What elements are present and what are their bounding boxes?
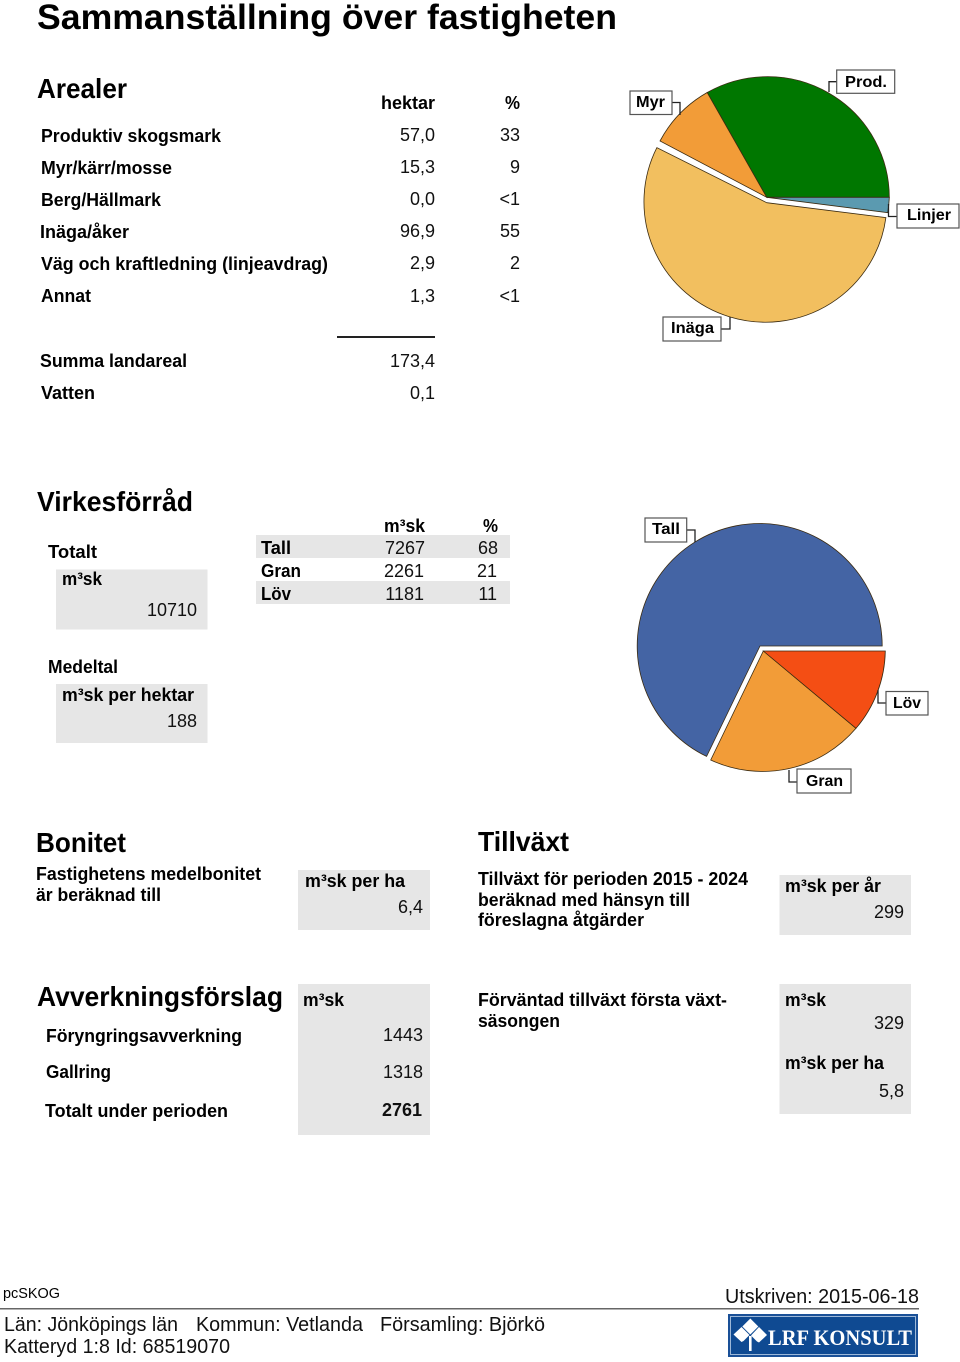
- property location: [4, 1314, 545, 1336]
- value box: totalt: m³sk: [62, 569, 103, 589]
- software name: pcSKOG: [3, 1285, 60, 1302]
- row: vatten: Vatten: [41, 383, 95, 403]
- label: Löv: [878, 690, 928, 715]
- text: förväntad tillväxt: [478, 990, 727, 1031]
- label: Tall: Tall: [652, 521, 680, 538]
- footer rule: [0, 1308, 919, 1310]
- value box: förväntad tillväxt: [780, 984, 911, 1114]
- species table: %: [483, 516, 498, 536]
- row: annat: 1,3: [410, 286, 435, 306]
- row: berg: <1: [499, 189, 520, 209]
- text: bonitet description: [36, 864, 261, 905]
- species table: Gran: [261, 561, 301, 581]
- label: Myr: [630, 91, 680, 115]
- label: Inäga: [663, 317, 730, 341]
- row: vatten: [41, 383, 435, 403]
- row: gallring: Gallring: [46, 1062, 111, 1082]
- value box: tillväxt per år: 299: [874, 902, 904, 922]
- panel: arealer table: [37, 73, 520, 403]
- row: inäga: [40, 221, 520, 242]
- row: myr: 9: [510, 157, 520, 177]
- species table: 68: [478, 538, 498, 558]
- row: myr: 15,3: [400, 157, 435, 177]
- row: produktiv skogsmark: [41, 125, 520, 146]
- text: förväntad tillväxt: säsongen: [478, 1011, 560, 1031]
- label: Löv: Löv: [893, 695, 921, 712]
- wedge: Prod.: [707, 77, 889, 197]
- value box: förväntad tillväxt: m³sk per ha: [785, 1053, 885, 1073]
- value box: medeltal: m³sk per hektar: [62, 685, 194, 705]
- heading: arealer: Arealer: [37, 73, 127, 104]
- value box: tillväxt per år: m³sk per år: [785, 876, 881, 896]
- panel: virkesförråd: [37, 486, 510, 743]
- row: inäga: 96,9: [400, 221, 435, 241]
- row: annat: [41, 286, 520, 306]
- row: myr: Myr/kärr/mosse: [41, 158, 172, 178]
- label: Gran: [789, 769, 851, 793]
- value box: tillväxt per år: [780, 875, 911, 935]
- footer: [0, 1285, 919, 1358]
- species table: [256, 516, 510, 604]
- row: berg: 0,0: [410, 189, 435, 209]
- row: summa landareal: [40, 351, 435, 371]
- species table: 7267: [385, 538, 425, 558]
- wedge: Löv: [763, 651, 885, 728]
- row: totalt under perioden: 2761: [382, 1100, 422, 1120]
- text: förväntad tillväxt: Förväntad tillväxt första växt-: [478, 990, 727, 1010]
- column headers: hektar: [381, 93, 435, 113]
- row: inäga: Inäga/åker: [40, 222, 129, 242]
- text: bonitet description: är beräknad till: [36, 885, 161, 905]
- label: Prod.: Prod.: [845, 74, 887, 91]
- row: gallring: [46, 1062, 423, 1082]
- wedge: Gran: [711, 651, 856, 771]
- row: väg och kraftledning: [41, 253, 520, 274]
- species table: 1181: [385, 584, 424, 604]
- species table: 21: [477, 561, 497, 581]
- text: tillväxt description: beräknad med hänsyn till: [478, 890, 690, 910]
- label: Linjer: [888, 204, 959, 228]
- value box background: [298, 984, 430, 1135]
- print date: Utskriven: 2015-06-18: [725, 1286, 919, 1308]
- row: totalt under perioden: Totalt under perioden: [45, 1101, 228, 1121]
- species table: 2261: [384, 561, 424, 581]
- panel: tillväxt: [478, 826, 911, 935]
- heading: virkesförråd: Virkesförråd: [37, 486, 193, 517]
- label: Myr: Myr: [636, 94, 665, 111]
- value box: förväntad tillväxt: 5,8: [879, 1081, 904, 1101]
- species table: m³sk: [384, 516, 426, 536]
- column unit: m³sk: [303, 990, 345, 1010]
- row: annat: Annat: [41, 286, 91, 306]
- row: berg: [41, 189, 520, 210]
- pie chart: arealer: [630, 70, 959, 341]
- heading: tillväxt: Tillväxt: [478, 826, 569, 857]
- row: totalt under perioden: [45, 1100, 422, 1121]
- logo: LRF Konsult: [728, 1314, 918, 1357]
- wedge: Linjer: [767, 197, 889, 213]
- wedge: Tall: [637, 524, 882, 756]
- text: tillväxt description: föreslagna åtgärder: [478, 910, 644, 930]
- text: bonitet description: Fastighetens medelbonitet: [36, 864, 261, 884]
- column headers: %: [505, 93, 520, 113]
- value box: bonitet: [298, 870, 430, 930]
- label: Gran: Gran: [806, 773, 843, 790]
- row: väg och kraftledning: 2: [510, 253, 520, 273]
- row: summa landareal: Summa landareal: [40, 351, 187, 371]
- species table: Löv: [261, 584, 291, 604]
- text: tillväxt description: [478, 869, 748, 930]
- row: produktiv skogsmark: 33: [500, 125, 520, 145]
- panel: förväntad tillväxt: [478, 984, 911, 1114]
- label: Prod.: [829, 70, 895, 93]
- value box: förväntad tillväxt: m³sk: [785, 990, 827, 1010]
- property location: Kommun: Vetlanda: [196, 1314, 364, 1336]
- row: gallring: 1318: [383, 1062, 423, 1082]
- value box: totalt: [56, 569, 208, 630]
- value box: förväntad tillväxt: 329: [874, 1013, 904, 1033]
- row: föryngringsavverkning: 1443: [383, 1025, 423, 1045]
- label: Linjer: Linjer: [907, 207, 951, 224]
- property location: Län: Jönköpings län: [4, 1314, 178, 1336]
- row: väg och kraftledning: 2,9: [410, 253, 435, 273]
- value box: medeltal: 188: [167, 711, 197, 731]
- row: produktiv skogsmark: Produktiv skogsmark: [41, 126, 222, 146]
- row: vatten: 0,1: [410, 383, 435, 403]
- property location: Församling: Björkö: [380, 1314, 545, 1336]
- value box: bonitet: m³sk per ha: [305, 871, 406, 891]
- icon: logo diamonds: [734, 1318, 767, 1351]
- row: produktiv skogsmark: 57,0: [400, 125, 435, 145]
- subheading: totalt: Totalt: [48, 542, 97, 562]
- pie chart: virkesförråd: [637, 518, 928, 793]
- row: föryngringsavverkning: Föryngringsavverkning: [46, 1026, 242, 1046]
- species table: 11: [478, 584, 497, 604]
- row: summa landareal: 173,4: [390, 351, 435, 371]
- species table: Tall: [261, 538, 291, 558]
- row: föryngringsavverkning: [46, 1025, 423, 1046]
- heading: avverkningsförslag: Avverkningsförslag: [37, 981, 283, 1012]
- value box: bonitet: 6,4: [398, 897, 423, 917]
- logo: LRF Konsult: LRF KONSULT: [768, 1325, 912, 1350]
- row: annat: <1: [499, 286, 520, 306]
- property id: Katteryd 1:8 Id: 68519070: [4, 1336, 230, 1358]
- label: Tall: [645, 518, 695, 542]
- wedge: Inäga: [644, 148, 886, 322]
- label: Inäga: Inäga: [671, 320, 714, 337]
- panel: bonitet: [36, 827, 430, 930]
- row: myr: [41, 157, 520, 178]
- sum rule: [337, 336, 435, 338]
- text: tillväxt description: Tillväxt för perioden 2015 - 2024: [478, 869, 748, 889]
- subheading: medeltal: Medeltal: [48, 657, 118, 677]
- panel: avverkningsförslag: [37, 981, 430, 1135]
- row: inäga: 55: [500, 221, 520, 241]
- value box: medeltal: [56, 684, 208, 743]
- column headers: [381, 93, 520, 113]
- row: berg: Berg/Hällmark: [41, 190, 162, 210]
- row: väg och kraftledning: Väg och kraftledning (linjeavdrag): [41, 254, 328, 274]
- value box: totalt: 10710: [147, 600, 197, 620]
- wedge: Myr: [660, 92, 767, 197]
- heading: bonitet: Bonitet: [36, 827, 126, 858]
